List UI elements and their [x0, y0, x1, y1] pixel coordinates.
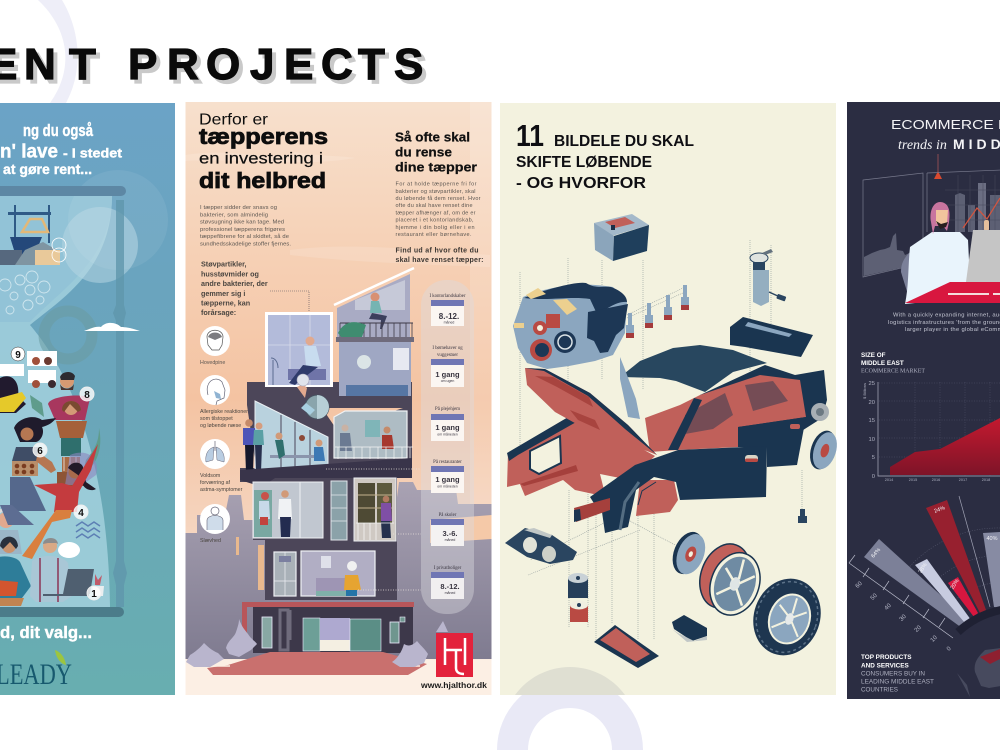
area chart: market size: 15 — [869, 418, 875, 424]
calendar: nurseries: 1 gang — [435, 370, 460, 379]
how often paragraph: ofte du skal have renset dine — [396, 203, 472, 209]
hourglass stand pole — [113, 200, 127, 607]
frequency pill — [421, 280, 474, 614]
causes heading: Støvpartikler, — [201, 260, 247, 268]
calendar: nurseries: om ugen — [441, 379, 454, 383]
calendar: offices: måned — [444, 320, 454, 324]
calendar: private homes — [431, 566, 464, 599]
causes heading: gemmer sig i — [201, 289, 245, 298]
heading: top products: TOP PRODUCTS — [861, 654, 912, 661]
value labels: 24% — [933, 505, 946, 515]
how often paragraph: bakterier og støvpartikler, skal — [396, 189, 476, 195]
heading: why carpet cleaning: Derfor er — [199, 112, 269, 128]
intro paragraph: tæppefibrene for al skidtet, så de — [200, 233, 289, 240]
heading: ecommerce trends: trends in — [898, 138, 947, 153]
intro paragraph — [888, 312, 1000, 333]
older woman — [0, 505, 34, 554]
calendar: nurseries: vuggestuer — [437, 353, 458, 358]
heading: top products: LEADING MIDDLE EAST — [861, 678, 934, 686]
how often paragraph: restaurant eller børnehave. — [396, 232, 472, 238]
speech tags — [0, 351, 57, 388]
panel: hourglass infographic — [0, 103, 175, 695]
intro paragraph: bakterier, som almindelig — [200, 212, 268, 218]
heading: 11 car parts — [516, 118, 694, 192]
number badges: 9 — [15, 350, 21, 361]
heading: market size — [861, 352, 925, 374]
heading: why carpet cleaning: tæpperens — [199, 124, 328, 149]
calendar: restaurants: 1 gang — [435, 475, 460, 484]
front bumper beam — [574, 498, 610, 522]
number badges: 1 — [91, 589, 97, 600]
area chart: market size: 2014 — [885, 478, 893, 482]
icon: location pin — [934, 154, 942, 179]
fan chart: top products: 50 — [870, 592, 879, 602]
icon: brake disc — [667, 527, 711, 579]
find out text — [396, 248, 484, 264]
symptom: headache — [200, 326, 230, 366]
heading: market size: MIDDLE EAST — [861, 360, 904, 367]
axis — [849, 555, 953, 638]
couple — [243, 419, 264, 472]
causes heading — [201, 260, 268, 317]
symptom: asthma — [200, 439, 243, 493]
heading: top products — [861, 654, 934, 694]
fan chart: top products: 20 — [914, 624, 923, 634]
heading: market size: ECOMMERCE MARKET — [861, 368, 925, 374]
fan chart: top products: 10 — [930, 634, 939, 644]
calendar: private homes: 8.-12. — [440, 582, 460, 591]
calendar: nurseries: I børnehaver og — [432, 346, 463, 351]
intro paragraph: professionel tæpperens frigøres — [200, 227, 285, 233]
area chart: market size: 25 — [869, 381, 875, 387]
calendar: restaurants — [431, 459, 464, 493]
heading: how often: Så ofte skal — [395, 130, 470, 144]
value labels: 40% — [986, 536, 998, 542]
heading: why carpet cleaning: en investering i — [199, 150, 323, 168]
icon: oil filters — [568, 573, 588, 622]
bubbles — [0, 271, 50, 314]
upper left window — [265, 312, 333, 387]
heading: how often: dine tæpper — [395, 160, 477, 174]
calendar: nursing homes: 1 gang — [435, 423, 460, 432]
symptom: asthma: Voldsom — [200, 473, 221, 479]
building body — [240, 382, 412, 600]
symptom: headache: Hovedpine — [200, 360, 225, 366]
value labels: 20% — [950, 578, 961, 591]
icon: spark plugs — [626, 285, 689, 338]
globe — [957, 610, 1000, 697]
heading: hourglass text: n' lave — [0, 142, 58, 162]
seated woman — [56, 401, 87, 486]
area chart: market size: 2018 — [982, 478, 990, 482]
causes heading: husstøvmider og — [201, 270, 259, 278]
intro paragraph: sundhedsskadelige stoffer fjernes. — [200, 241, 291, 247]
hourglass top bar — [0, 186, 126, 196]
machine and bucket — [0, 205, 66, 265]
icon: brake pad — [672, 615, 707, 642]
floor slab — [240, 458, 412, 487]
frequency calendars — [429, 294, 466, 599]
area chart: market size: 2016 — [932, 478, 940, 482]
panel: ecommerce infographic — [847, 102, 1000, 699]
how often paragraph — [396, 182, 481, 238]
area chart: market size — [862, 381, 1000, 482]
calendar: nursing homes — [431, 406, 464, 441]
heading: how often — [395, 130, 477, 174]
fan chart: top products — [849, 496, 1000, 697]
heading: 11 car parts: SKIFTE LØBENDE — [516, 154, 652, 171]
rear hatch — [730, 317, 813, 357]
rear door — [738, 417, 806, 467]
symptom: allergic reactions: som tilstoppet — [200, 416, 233, 422]
calendar: offices: I kontorlandskaber — [429, 294, 466, 299]
number badges: 8 — [84, 390, 90, 401]
intro paragraph: støvsugning ikke kan tage. Med — [200, 220, 284, 226]
man in thobe — [905, 202, 970, 304]
icon: cloud — [84, 323, 140, 331]
skyline — [185, 482, 492, 659]
level three right window — [334, 411, 413, 459]
bars — [864, 539, 968, 628]
value labels — [870, 505, 998, 591]
car body — [507, 317, 827, 533]
rear frame — [700, 365, 827, 432]
calendar: schools — [431, 512, 464, 546]
house illustration — [186, 268, 448, 675]
ground floor — [242, 602, 414, 653]
level two narrow window — [331, 481, 347, 540]
area chart: market size: 0 — [872, 474, 875, 480]
calendar: nursing homes: På plejehjem — [435, 406, 460, 412]
title: recent projects: ENT PROJECTS — [0, 40, 423, 89]
icon: magnifier with hand — [297, 374, 329, 419]
red desk — [905, 282, 1000, 303]
causes heading: andre bakterier, der — [201, 279, 268, 288]
icon: headlight — [505, 528, 577, 564]
area chart: market size: 10 — [869, 437, 875, 443]
symptom: allergic reactions: og løbende næse — [200, 423, 241, 429]
balcony — [336, 322, 414, 342]
icon: wheel bolt — [798, 509, 807, 523]
icon: battery — [594, 214, 649, 261]
roof slant — [334, 268, 414, 305]
terrace — [207, 652, 427, 675]
dashboard illustration — [863, 170, 1000, 304]
fender and front door — [590, 446, 767, 533]
roof — [620, 345, 767, 392]
how often paragraph: For at holde tæpperne fri for — [396, 182, 477, 188]
red trend line — [963, 198, 1000, 228]
plants — [30, 395, 100, 466]
pillar — [668, 398, 702, 450]
panel: car parts infographic — [500, 103, 842, 695]
calendar: nurseries — [431, 346, 464, 387]
heading: hourglass text: - I stedet — [63, 146, 123, 160]
monitor — [966, 230, 1000, 282]
causes heading: forårsage: — [201, 308, 236, 317]
laptop — [43, 569, 94, 596]
heading: ecommerce trends — [891, 117, 1000, 153]
calendar: schools: 3.-6. — [442, 529, 458, 538]
people illustration — [0, 351, 104, 606]
red swimmer — [22, 444, 98, 559]
waves — [76, 522, 100, 538]
left skyline — [864, 233, 923, 276]
area chart: market size: 5 — [872, 455, 875, 461]
area chart: market size: 2017 — [959, 478, 967, 482]
icon: gear — [44, 311, 92, 359]
icon: air filter — [594, 625, 659, 668]
symptom: fatigue: Slævhed — [200, 538, 221, 544]
cabin interior — [645, 375, 806, 452]
woman on balcony — [369, 292, 387, 329]
number badges — [11, 347, 101, 600]
logo: leady — [0, 650, 72, 684]
icon: rim — [690, 537, 770, 622]
number badges: 6 — [37, 446, 43, 457]
keyboard — [948, 293, 1000, 295]
front structure — [507, 416, 655, 498]
heading: ecommerce trends: ECOMMERCE M — [891, 117, 1000, 132]
heading: hourglass text: ng du også — [23, 121, 93, 140]
symptom: asthma: astma-symptomer — [200, 487, 243, 493]
heading: hourglass text: at gøre rent... — [3, 161, 92, 177]
chair — [901, 252, 919, 298]
symptom: allergic reactions: Allergiske reaktioner, — [200, 409, 249, 415]
hand — [984, 220, 989, 231]
icon: hub — [811, 403, 829, 421]
how often paragraph: du løbende få dem renset. Hvor — [396, 195, 481, 202]
fan chart: top products: 40 — [884, 602, 893, 612]
heading: top products: CONSUMERS BUY IN — [861, 670, 925, 678]
icon: engine — [513, 283, 628, 369]
hourglass bottom bar — [0, 607, 124, 617]
area chart: market size: $ Billions — [862, 383, 867, 399]
heading: top products: AND SERVICES — [861, 662, 910, 670]
man with laptop — [30, 538, 72, 602]
right skyline — [955, 183, 1000, 232]
baker woman — [10, 417, 56, 511]
number badges: 4 — [78, 508, 84, 519]
icon: rear brake disc — [805, 427, 842, 473]
level two window left — [253, 482, 323, 538]
heading: why carpet cleaning: dit helbred — [199, 168, 326, 193]
calendar: offices — [429, 294, 466, 326]
area chart: market size: 20 — [869, 400, 875, 406]
intro paragraph: I tæpper sidder der snavs og — [200, 205, 277, 211]
area chart: market size: 2015 — [909, 478, 917, 482]
causes heading: tæpperne, kan — [201, 298, 250, 308]
website: www.hjalthor.dk — [420, 681, 488, 690]
fan chart: top products: 60 — [855, 580, 864, 590]
calendar: private homes: måned — [445, 591, 455, 595]
office window — [339, 342, 411, 396]
shrubs — [186, 619, 448, 667]
potted plant — [92, 574, 104, 596]
yellow woman — [0, 376, 26, 413]
how often paragraph: tæpper afhænger af, om de er — [396, 210, 476, 216]
heading: hourglass text — [0, 121, 123, 177]
calendar: restaurants: om måneden — [437, 484, 458, 488]
living room window — [301, 551, 375, 596]
heading: how often: du rense — [395, 144, 452, 160]
heading: 11 car parts: - OG HVORFOR — [516, 175, 646, 192]
symptom: asthma: forværring af — [200, 480, 231, 486]
upper right unit — [337, 274, 410, 340]
level three slanted window — [255, 401, 328, 470]
heading: market size: SIZE OF — [861, 352, 886, 359]
reading woman — [0, 537, 31, 606]
bearded man — [48, 372, 90, 420]
find out text: skal have renset tæpper: — [396, 257, 484, 264]
heading: top products: COUNTRIES — [861, 686, 898, 694]
calendar: offices: 8.-12. — [439, 312, 459, 321]
logo: hjalthor — [436, 633, 473, 677]
icon: fuel pump — [750, 249, 786, 306]
find out text: Find ud af hvor ofte du — [396, 248, 478, 254]
symptom: fatigue — [200, 504, 230, 544]
fan chart: top products: 30 — [899, 613, 908, 623]
heading: 11 car parts: 11 — [516, 118, 544, 153]
calendar: schools: måned — [445, 538, 455, 542]
heading: 11 car parts: BILDELE DU SKAL — [554, 133, 694, 150]
intro paragraph — [200, 205, 291, 247]
closing line: d, dit valg... — [0, 623, 92, 642]
dotted guide lines — [520, 240, 802, 640]
how often paragraph: placeret i et kontorlandskab, — [396, 218, 474, 224]
speech bubble — [58, 542, 80, 558]
how often paragraph: hjemme i din bolig eller i en — [396, 225, 474, 231]
library window — [354, 478, 396, 541]
level one small window — [274, 552, 296, 596]
fan chart: top products: 0 — [946, 646, 953, 653]
calendar: nursing homes: om måneden — [437, 432, 458, 436]
panel: carpet cleaning infographic — [185, 102, 492, 696]
hourglass glass — [0, 170, 168, 607]
calendar: schools: På skoler — [439, 512, 457, 518]
value labels: 64% — [870, 547, 882, 559]
heading: why carpet cleaning — [199, 112, 328, 193]
hood — [525, 368, 657, 455]
calendar: restaurants: På restauranter — [433, 459, 462, 465]
value labels: 38% — [918, 562, 929, 575]
calendar: private homes: I privatboliger — [434, 566, 462, 571]
fender arch interior — [636, 480, 678, 516]
symptom: allergic reactions — [200, 375, 249, 429]
icon: tire — [743, 569, 831, 665]
